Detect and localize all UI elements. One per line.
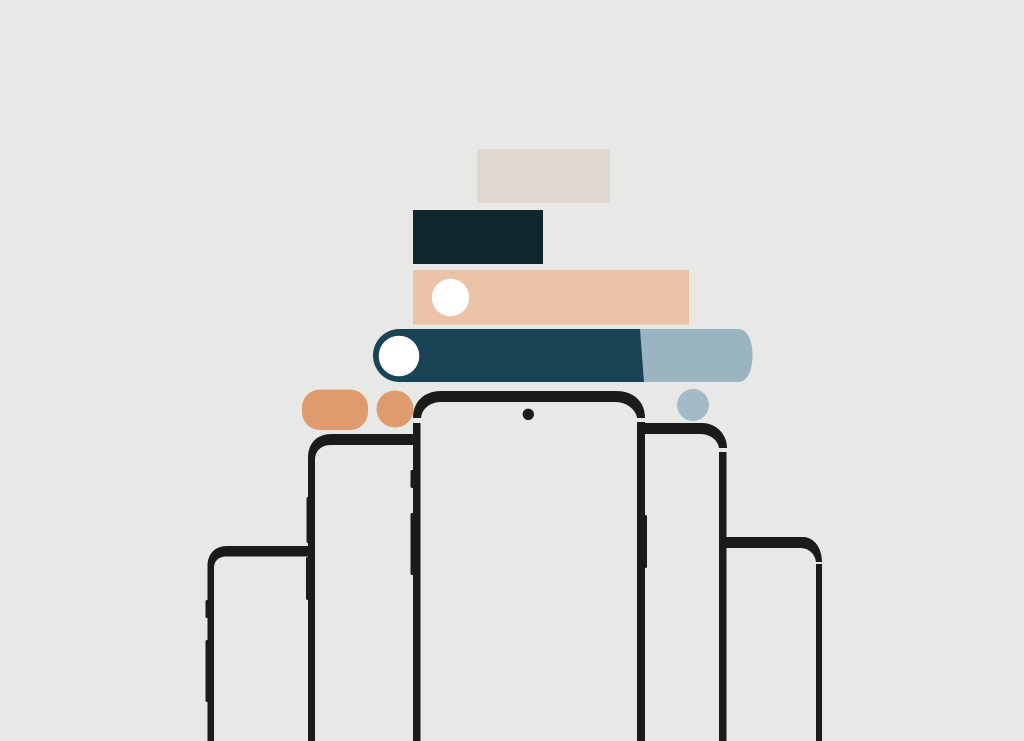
orange pill: [302, 390, 368, 430]
beige bar: [477, 149, 610, 203]
phone left: [306, 434, 414, 741]
phone center: [410, 391, 647, 741]
phone far left: [206, 546, 308, 741]
light blue dot: [677, 389, 709, 421]
dark navy bar: [413, 210, 543, 264]
orange dot: [376, 390, 414, 428]
phone right: [645, 423, 727, 741]
teal and light blue pill bar with white dot: [373, 329, 752, 382]
phone far right: [726, 537, 822, 741]
peach bar with white dot: [413, 270, 689, 324]
camera dot: [523, 409, 534, 420]
